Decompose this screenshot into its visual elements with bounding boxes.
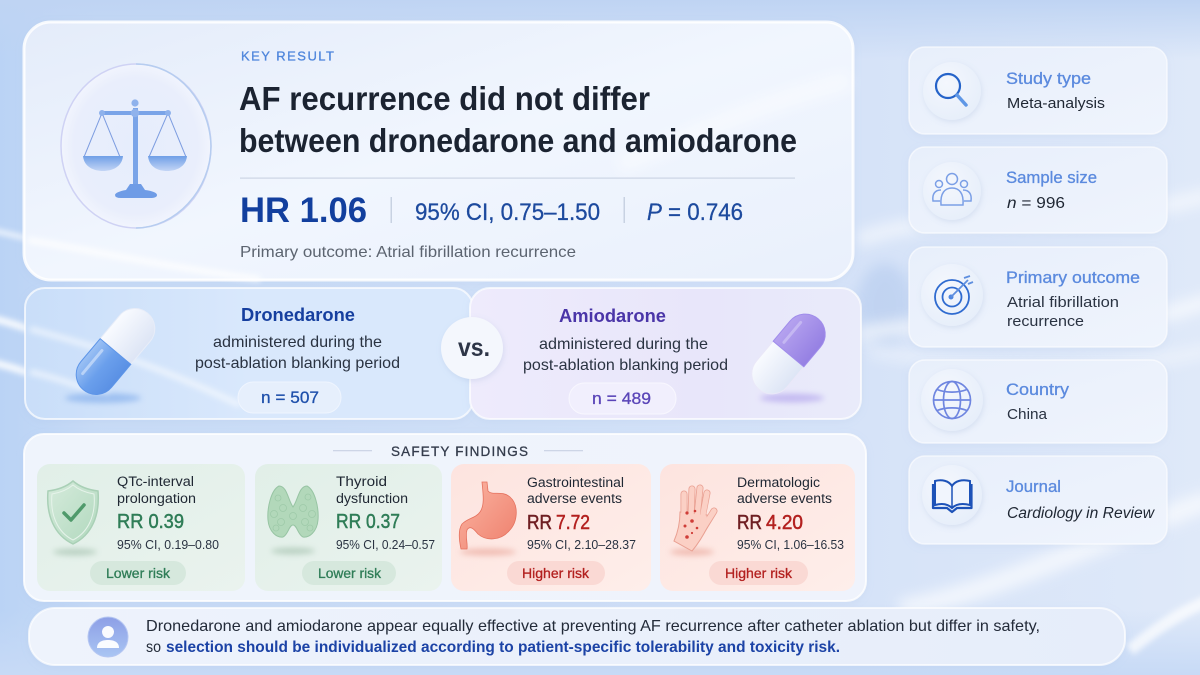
card: dermatologic adverse events: 4.20 [766, 512, 803, 534]
card: QTc prolongation: prolongation [117, 491, 196, 506]
sample size pill: n = 507 [261, 388, 319, 407]
card: dermatologic adverse events [660, 464, 855, 591]
drug name and dosing: post-ablation blanking period [523, 357, 728, 374]
panel: country [909, 360, 1167, 443]
card: dermatologic adverse events: adverse events [737, 491, 832, 506]
drug name and dosing [523, 305, 728, 374]
panel: primary outcome [909, 247, 1167, 347]
sample size pill [569, 383, 676, 414]
icon: person avatar [88, 617, 128, 657]
panel: study type: Study type [1006, 70, 1091, 88]
icon: open book [922, 465, 982, 525]
hazard ratio statistics: HR 1.06 [240, 191, 367, 230]
panel: country: China [1007, 406, 1048, 423]
drug name and dosing: administered during the [213, 334, 382, 351]
drug name and dosing: post-ablation blanking period [195, 355, 400, 372]
panel: study type: Meta-analysis [1007, 95, 1105, 112]
card: QTc prolongation: QTc-interval [117, 474, 194, 489]
card: thyroid dysfunction: dysfunction [336, 491, 408, 506]
headline [239, 80, 797, 159]
panel: sample size: Sample size [1006, 169, 1097, 187]
icon: target with arrow [921, 264, 983, 326]
panel: journal: Cardiology in Review [1007, 505, 1156, 522]
vs. badge: vs. [458, 334, 490, 362]
icon: balance scale [61, 64, 211, 228]
hazard ratio statistics [240, 191, 743, 230]
icon: shield with check [48, 481, 98, 556]
vs. badge [441, 317, 503, 379]
icon: purple and white capsule [744, 306, 833, 402]
icon: stomach [459, 482, 516, 556]
panel: primary outcome: recurrence [1007, 313, 1084, 330]
panel: sample size [909, 147, 1167, 233]
card: thyroid dysfunction: 95% CI, 0.24–0.57 [336, 538, 435, 552]
conclusion text: selection should be individualized according to patient-specific tolerability and toxicity risk. [166, 639, 840, 656]
card: thyroid dysfunction: Lower risk [318, 566, 381, 581]
eyebrow: KEY RESULT [241, 48, 334, 64]
card: gastrointestinal adverse events: Higher risk [522, 566, 589, 581]
headline: AF recurrence did not differ [239, 80, 650, 117]
icon: blue and white capsule [65, 300, 163, 403]
conclusion text: Dronedarone and amiodarone appear equally effective at preventing AF recurrence after catheter ablation but differ in safety, [146, 618, 1040, 635]
panel: safety findings [24, 434, 866, 601]
card: gastrointestinal adverse events: 7.72 [556, 512, 590, 534]
panel: primary outcome: Primary outcome [1006, 269, 1140, 287]
panel: sample size: n = 996 [1007, 195, 1065, 212]
panel: amiodarone arm [470, 288, 861, 419]
card: QTc prolongation: 95% CI, 0.19–0.80 [117, 538, 219, 552]
card: gastrointestinal adverse events: Gastrointestinal [527, 475, 624, 490]
icon: hand with rash [670, 488, 714, 556]
card: QTc prolongation: Lower risk [106, 566, 170, 581]
card: gastrointestinal adverse events [451, 464, 651, 591]
panel: country: Country [1006, 381, 1070, 399]
card: QTc prolongation [37, 464, 245, 591]
card: QTc prolongation: RR 0.39 [117, 511, 184, 533]
card: thyroid dysfunction: RR 0.37 [336, 511, 400, 533]
sample size pill [238, 382, 341, 413]
headline: between dronedarone and amiodarone [239, 122, 797, 159]
conclusion text [146, 618, 1040, 656]
card: thyroid dysfunction [255, 464, 442, 591]
icon: globe [921, 369, 983, 431]
panel: journal: Journal [1006, 478, 1061, 496]
card: dermatologic adverse events: Higher risk [725, 566, 792, 581]
panel: journal [909, 456, 1167, 544]
card: gastrointestinal adverse events: adverse events [527, 491, 622, 506]
icon: thyroid gland [268, 486, 318, 554]
panel: study type [909, 47, 1167, 134]
drug name and dosing: Dronedarone [241, 304, 355, 325]
hazard ratio statistics: P = 0.746 [647, 199, 743, 226]
card: gastrointestinal adverse events: RR [527, 512, 552, 534]
drug name and dosing: Amiodarone [559, 305, 666, 326]
drug name and dosing [195, 304, 400, 372]
panel: conclusion [29, 608, 1125, 665]
hazard ratio statistics: 95% CI, 0.75–1.50 [415, 199, 600, 226]
card: dermatologic adverse events: Dermatologic [737, 475, 820, 490]
panel: key result [24, 22, 853, 280]
icon: people group [923, 162, 981, 220]
card: dermatologic adverse events: RR [737, 512, 762, 534]
card: thyroid dysfunction: Thyroid [336, 474, 387, 489]
conclusion text: so [146, 639, 161, 656]
panel: primary outcome: Atrial fibrillation [1007, 294, 1119, 311]
icon: magnifying glass [923, 62, 981, 120]
drug name and dosing: administered during the [539, 336, 708, 353]
sample size pill: n = 489 [592, 389, 651, 408]
primary outcome note: Primary outcome: Atrial fibrillation recurrence [240, 244, 576, 261]
safety heading: SAFETY FINDINGS [391, 444, 528, 459]
card: dermatologic adverse events: 95% CI, 1.06–16.53 [737, 538, 844, 552]
panel: dronedarone arm [25, 288, 473, 419]
card: gastrointestinal adverse events: 95% CI, 2.10–28.37 [527, 538, 636, 552]
